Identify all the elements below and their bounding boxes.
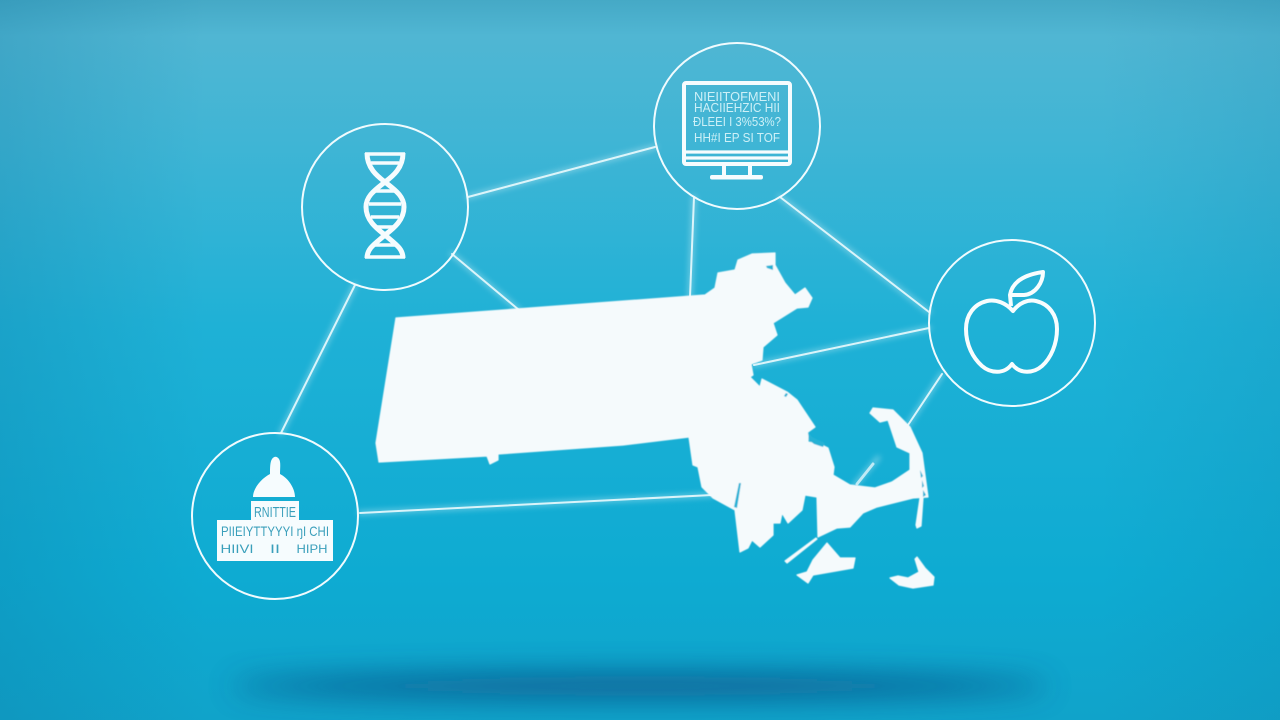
node: apple	[929, 240, 1095, 406]
map: Nantucket	[890, 557, 934, 588]
node: government	[192, 433, 358, 599]
node: computer	[654, 43, 820, 209]
floor shadow	[230, 674, 1050, 698]
connector lines	[281, 147, 942, 513]
capitol building inscriptions: HIIVI	[220, 542, 254, 556]
map: mainland and Cape Cod	[376, 253, 928, 552]
icon: apple	[966, 272, 1057, 372]
node: DNA	[302, 124, 468, 290]
icon: DNA helix	[365, 153, 405, 258]
capitol building inscriptions: PIIEIYTTYYYI ŋI CHI	[221, 523, 329, 539]
map: inlets	[734, 265, 926, 508]
monitor screen text: HACIIEHZIC HII	[694, 100, 780, 115]
map: Massachusetts	[376, 253, 934, 588]
monitor screen text: ĐLEEI I 3%53%?	[693, 114, 781, 129]
map: barrier strip	[785, 538, 817, 563]
monitor screen text	[693, 89, 781, 145]
map: Monomoy strip	[916, 498, 923, 528]
monitor screen text: HH#I EP SI TOF	[694, 130, 780, 145]
monitor screen text: NIEIITOFMENI	[694, 89, 780, 104]
map: Martha's Vineyard	[797, 543, 855, 583]
capitol building inscriptions: II	[270, 542, 280, 556]
capitol building inscriptions: RNITTIE	[254, 504, 296, 521]
icon: monitor	[684, 83, 790, 180]
capitol building inscriptions	[220, 504, 329, 556]
icon: capitol building	[217, 457, 333, 561]
capitol building inscriptions: HIPH	[296, 542, 328, 556]
